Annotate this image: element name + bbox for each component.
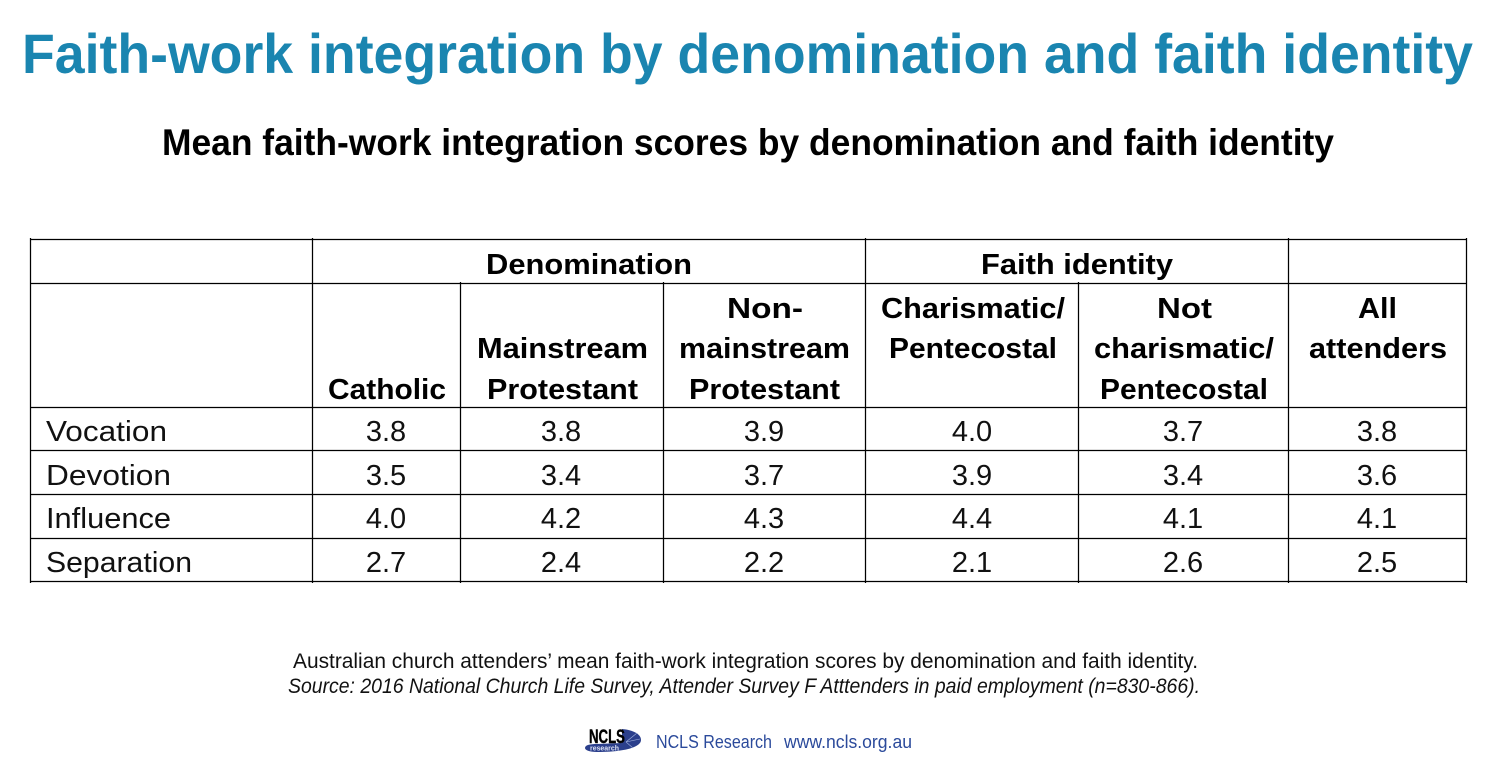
row: Devotion: 3.4 bbox=[1163, 460, 1203, 492]
row: Separation: Separation bbox=[46, 547, 192, 579]
row: Influence: 4.0 bbox=[366, 503, 406, 535]
row: Separation: 2.4 bbox=[541, 547, 581, 579]
row: Separation bbox=[46, 547, 1397, 579]
footer: organisation and website bbox=[656, 732, 912, 752]
row: Vocation: 4.0 bbox=[952, 416, 992, 448]
column headers: Non- bbox=[727, 293, 803, 325]
group headers: Faith identity bbox=[981, 249, 1173, 281]
row: Devotion: 3.9 bbox=[952, 460, 992, 492]
row: Separation: 2.6 bbox=[1163, 547, 1203, 579]
row: Vocation: 3.8 bbox=[366, 416, 406, 448]
row: Influence bbox=[46, 503, 1397, 535]
title: Faith-work integration by denomination and faith identity bbox=[22, 22, 1473, 85]
caption: Australian church attenders’ mean faith-work integration scores by denomination and faith identity. bbox=[293, 650, 1198, 673]
column headers bbox=[328, 293, 1447, 406]
group headers bbox=[486, 249, 1173, 281]
icon: NCLS logo: NCLS bbox=[589, 726, 625, 748]
row: Separation: 2.1 bbox=[952, 547, 992, 579]
column headers: Mainstream bbox=[477, 333, 648, 365]
row: Devotion: 3.6 bbox=[1357, 460, 1397, 492]
row: Separation: 2.5 bbox=[1357, 547, 1397, 579]
row: Vocation: 3.9 bbox=[744, 416, 784, 448]
column headers: charismatic/ bbox=[1094, 333, 1274, 365]
column headers: Not bbox=[1157, 293, 1212, 325]
group headers: Denomination bbox=[486, 249, 692, 281]
column headers: Protestant bbox=[689, 374, 840, 406]
row: Vocation: 3.8 bbox=[1357, 416, 1397, 448]
footer: organisation and website: NCLS Research bbox=[656, 732, 772, 752]
row: Vocation: Vocation bbox=[46, 416, 167, 448]
row: Devotion bbox=[46, 460, 1397, 492]
row: Influence: Influence bbox=[46, 503, 171, 535]
column headers: attenders bbox=[1309, 333, 1447, 365]
row: Vocation: 3.8 bbox=[541, 416, 581, 448]
row: Influence: 4.3 bbox=[744, 503, 784, 535]
icon: NCLS logo: research bbox=[590, 746, 619, 752]
row: Devotion: 3.4 bbox=[541, 460, 581, 492]
source note: Source: 2016 National Church Life Survey, Attender Survey F Atttenders in paid employment (n=830-866). bbox=[288, 675, 1200, 698]
footer: organisation and website: www.ncls.org.au bbox=[783, 732, 912, 752]
column headers: Charismatic/ bbox=[881, 293, 1065, 325]
row: Separation: 2.7 bbox=[366, 547, 406, 579]
row: Vocation: 3.7 bbox=[1163, 416, 1203, 448]
row: Separation: 2.2 bbox=[744, 547, 784, 579]
column headers: Pentecostal bbox=[889, 333, 1057, 365]
column headers: Pentecostal bbox=[1100, 374, 1268, 406]
row: Devotion: 3.5 bbox=[366, 460, 406, 492]
column headers: All bbox=[1358, 293, 1397, 325]
row: Influence: 4.4 bbox=[952, 503, 992, 535]
subtitle: Mean faith-work integration scores by denomination and faith identity bbox=[162, 122, 1334, 163]
row: Influence: 4.1 bbox=[1357, 503, 1397, 535]
row: Devotion: Devotion bbox=[46, 460, 171, 492]
row: Influence: 4.1 bbox=[1163, 503, 1203, 535]
column headers: Protestant bbox=[487, 374, 638, 406]
row: Vocation bbox=[46, 416, 1397, 448]
row: Devotion: 3.7 bbox=[744, 460, 784, 492]
table bbox=[30, 238, 1467, 583]
column headers: Catholic bbox=[328, 374, 446, 406]
row: Influence: 4.2 bbox=[541, 503, 581, 535]
column headers: mainstream bbox=[679, 333, 850, 365]
